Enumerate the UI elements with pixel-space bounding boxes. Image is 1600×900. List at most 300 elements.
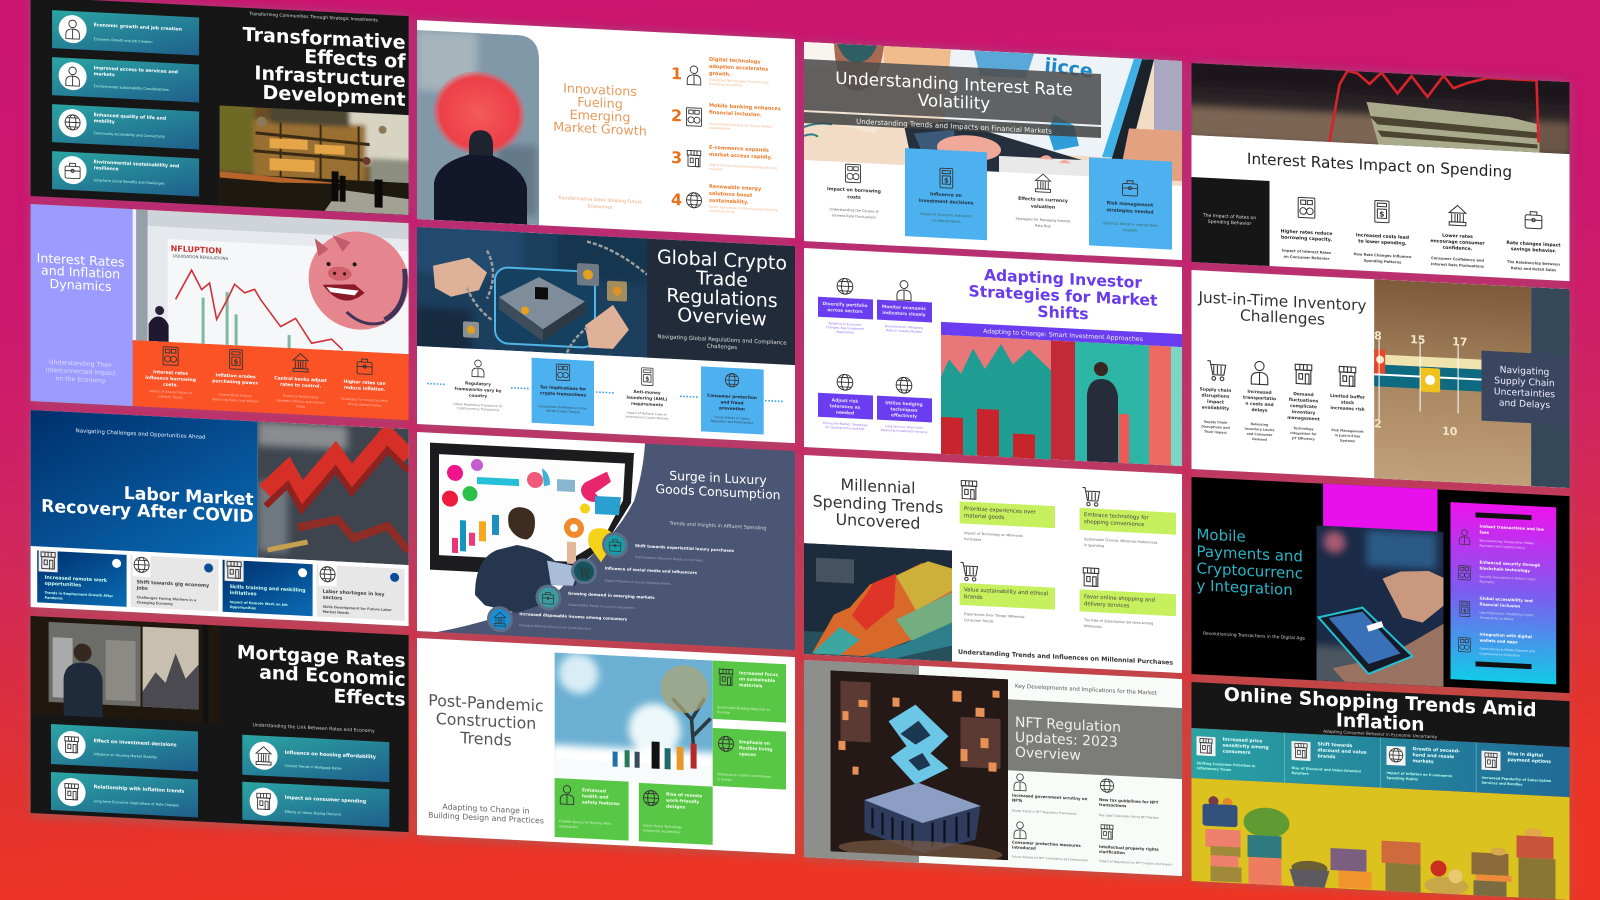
card 4: Favor online shopping and (1084, 594, 1155, 604)
item 3 (626, 367, 669, 421)
item 4 (671, 182, 778, 216)
item 2 (1292, 740, 1367, 779)
item 2: Retailers (1292, 771, 1309, 776)
subtitle: Revolutionizing Transactions in the Digital Age (1203, 631, 1305, 642)
item 1: costs (847, 194, 861, 201)
point 4 (487, 606, 628, 639)
photo: inflation chart and pig (132, 209, 409, 354)
item 3: Technology (1293, 426, 1315, 431)
card: adjust risk: needed (836, 410, 854, 417)
item 1: Increased price (1222, 737, 1262, 745)
strip dividers (1284, 733, 1476, 792)
card: diversify: Approaches (836, 330, 854, 335)
card 1: Pandemic (45, 596, 63, 601)
card 2: shopping convenience (1084, 519, 1145, 528)
item 2: financial inclusion. (709, 110, 762, 118)
item 3: Impact of Rational Laws on (627, 411, 667, 417)
item 4: Limited buffer (1330, 393, 1366, 401)
card 4: Millennials (1084, 624, 1102, 629)
title: Dynamics (50, 276, 112, 294)
gradient panel (1450, 502, 1556, 684)
item 3: inventory (1292, 409, 1315, 416)
item 4: Consumer protection (707, 393, 757, 400)
slide: Mobile Payments and Cryptocurrency Integration (1192, 477, 1570, 698)
item 1: Disruptions and (1201, 424, 1230, 430)
photo: desk and laptop (804, 42, 1182, 186)
item 3: complicate (1290, 403, 1317, 410)
green card 2: Emphasis on (739, 739, 770, 747)
item 2 (919, 167, 974, 225)
item 4: Intellectual property rights (1099, 844, 1159, 852)
subtitle: Trends and Insights in Affluent Spending (669, 521, 766, 532)
item 1: borrowing capacity. (1281, 235, 1332, 243)
item 1 (1196, 735, 1269, 774)
photo: man with red sphere (417, 30, 539, 225)
card 3: Experiences Over Things: Millennial (964, 612, 1025, 619)
green card 1: the Rise (717, 710, 730, 715)
item 1: Impact of Interest Rates on (149, 389, 192, 395)
slide: Millennial Spending Trends Uncovered (804, 455, 1182, 673)
slide: Post-Pandemic Construction Trends (417, 638, 795, 854)
item 4: reduce inflation. (344, 385, 386, 393)
item 2: transportatio (1243, 395, 1276, 402)
green card 2: spaces (739, 752, 756, 758)
green card 3: Flexible Spaces for Remote Work (559, 819, 612, 826)
item 4: Historical Trends in Interest Rate (1102, 221, 1158, 228)
item 2: Increased costs lead (1356, 232, 1409, 241)
card: diversify: Changes: Key Investment (826, 325, 865, 331)
item 1 (145, 346, 196, 400)
item 4: Services and Bundles (1482, 781, 1522, 787)
title: Strategies for Market (969, 282, 1158, 310)
title: Interest Rates (37, 250, 125, 270)
item 3: Global accessibility and (1480, 596, 1533, 603)
card: access: markets (94, 71, 115, 78)
item 4 (707, 372, 757, 425)
item 2: Compliance Challenges in Cross- (538, 404, 588, 411)
photo: building (220, 106, 409, 216)
item 4: Higher rates can (344, 379, 386, 387)
card 1: opportunities (45, 581, 81, 589)
card 2: Challenges Facing Workers in a (137, 595, 197, 602)
item 4: 4 (671, 190, 682, 209)
card 2: in Spending (1084, 543, 1104, 548)
dotted arrows (427, 384, 783, 401)
subtitle: Adapting to Change in (442, 802, 530, 816)
card: investment decisions: Influence on Housing Market Stability (94, 752, 157, 759)
item 4 (1102, 179, 1158, 234)
card: adjust risk: for Optimal Entry and Exit (825, 425, 865, 431)
title: and Economic (259, 663, 406, 691)
title: Surge in Luxury (669, 468, 767, 488)
card: housing affordability: Influence on housing affordability (285, 750, 377, 760)
slide: Interest Rates and Inflation Dynamics (31, 204, 409, 420)
photo: crypto locks (417, 227, 647, 358)
item 2 (1243, 361, 1276, 442)
title: Trade (695, 267, 748, 292)
green card 2: Emphasis on Health and Wellness (717, 772, 771, 779)
item 4 (1482, 750, 1552, 788)
item 2: transactions (1099, 802, 1127, 808)
item 4: Risk Management (1331, 428, 1364, 434)
item 1 (453, 359, 503, 412)
card: access: Environmental Sustainability Considerations (94, 84, 169, 92)
photo: winter scene (554, 652, 713, 786)
item 2: n costs and (1245, 401, 1274, 408)
subtitle: Adapting Consumer Behavior in Economic Uncertainty (1323, 729, 1438, 739)
title: Uncovered (836, 510, 920, 533)
title: Fueling (577, 94, 623, 111)
card: quality of life: mobility (94, 118, 115, 125)
card: sustainability: resilience (94, 165, 119, 172)
item 3: Digital Finance Revolutionizing Access and (709, 163, 777, 170)
photo: NFT cube (830, 670, 1008, 860)
title: Effects (334, 686, 406, 711)
item 1 (671, 55, 769, 89)
card text: Supply Chain (1494, 375, 1555, 389)
item 1: Disruptive Technologies Transforming (709, 78, 769, 85)
title: Online Shopping Trends Amid (1224, 685, 1537, 721)
green card 4: designs (666, 804, 685, 811)
item 4 (1099, 825, 1172, 867)
slide: Transformative Effects of Infrastructure Development (31, 0, 415, 215)
item 2: blockchain technology (1480, 566, 1530, 573)
item 1: Supply Chain (1204, 420, 1228, 425)
card 2 (131, 554, 219, 611)
item 3: Rate Risk (1035, 224, 1051, 228)
item 4: Increased Popularity of Subscription (1482, 776, 1552, 783)
item 3: laundering (AML) (627, 395, 668, 402)
item 1: Emerging Economies (709, 82, 743, 87)
card 2: Embrace technology for (1084, 512, 1149, 521)
card 4 (317, 563, 405, 621)
photo: timeline: 17 (1452, 335, 1467, 349)
subtitle: Challenges (707, 344, 737, 351)
item 3 (274, 352, 328, 410)
slide: Labor Market Recovery After COVID (31, 410, 409, 626)
item 4: Systems (1340, 438, 1355, 443)
item 4: Volatility (1123, 228, 1137, 233)
item 3: Future Outlook for NFT Compliance and Enforcement (1012, 855, 1089, 862)
kicker: Key Developments and Implications for the Market (1015, 684, 1158, 697)
item 3: hand and resale (1412, 752, 1454, 760)
item 4: prevention (719, 405, 745, 412)
title: Mortgage Rates (237, 642, 406, 672)
item 4: Regulation and Enforcement (711, 419, 754, 425)
item 1: costs. (163, 382, 178, 388)
item 2 (671, 101, 781, 133)
card: economic growth: Economic growth and job creation (94, 22, 182, 33)
card: monitor: Monitor economic (882, 304, 927, 312)
item 2: Rise of Discount and Value-Oriented (1292, 766, 1361, 774)
card: housing affordability: Current Trends in Mortgage Rates (285, 764, 342, 771)
item 1: Global Regulatory Framework for (453, 402, 503, 408)
card: monitor (877, 279, 932, 334)
card 4: sectors (323, 595, 342, 602)
card: inflation trends (51, 772, 198, 817)
item 3: management (1287, 415, 1320, 422)
card: adjust risk: Adjust risk (832, 397, 858, 405)
green card 4: work-friendly (666, 798, 699, 805)
item 3 (1016, 173, 1071, 229)
point 1: Post-Pandemic Recovery Boosts Luxury Sales (635, 555, 703, 562)
man at screen (475, 505, 581, 616)
card 1: Increased remote work (45, 575, 108, 584)
card: access: Improved access to services and (94, 65, 178, 75)
subtitle: Navigating Challenges and Opportunities Ahead (76, 428, 206, 441)
card: monitor: Diversification: Mitigating (885, 324, 923, 330)
card: quality of life: Enhanced quality of life and (94, 112, 166, 122)
item 2 (1354, 199, 1412, 265)
monitor with charts (430, 443, 634, 580)
card 4 (1089, 157, 1172, 250)
magenta block (1323, 484, 1438, 539)
card 4: Skills Development for Future Labor (323, 605, 392, 612)
card: consumer spending: Impact on consumer spending (285, 795, 367, 805)
navigating card (1482, 351, 1570, 425)
item 1: Supply chain (1200, 386, 1231, 394)
item 1: consumers (1222, 749, 1251, 756)
item 2: Impact of Economic Indicators (920, 212, 972, 218)
card 3 (960, 562, 1055, 627)
subtitle: Interconnected Impact (46, 367, 116, 377)
item 1: Their Impact (1204, 430, 1227, 435)
item 1: on Consumer Behavior (1284, 255, 1330, 261)
item 4: Cryptocurrency Integration (1480, 652, 1520, 658)
subtitle band (804, 112, 1101, 138)
point 4: Increased disposable income among consumers (519, 611, 628, 622)
item 2: Development (709, 126, 731, 131)
point 2: Digital Influence on Luxury Shopping Habits (605, 578, 671, 586)
item 1: availability (1202, 405, 1229, 412)
item 4: Impact of Regulations on NFT Creators and Buyers (1099, 859, 1172, 867)
item 4: Strategies for Investing Amid (341, 397, 388, 403)
title: Just-in-Time Inventory (1197, 288, 1367, 315)
green card 3: health and (582, 793, 609, 801)
blue title panel (31, 410, 258, 557)
item 2: Border Crypto Trading (547, 409, 580, 414)
item 3 (1386, 745, 1460, 784)
card: sustainability: Long-term Social Benefits and Challenges (94, 178, 165, 186)
title: y Integration (1196, 576, 1293, 599)
green card 4 (639, 783, 713, 845)
title: Challenges (1240, 306, 1325, 329)
photo: phone in hand (1316, 526, 1444, 687)
item 4 (1459, 630, 1535, 658)
item 4: solutions boost (709, 191, 753, 199)
item 3: Historical Relationship (283, 394, 318, 400)
title: Regulations (666, 285, 778, 312)
item 2: New tax guidelines for NFT (1099, 797, 1159, 805)
item 1: Interest rates (153, 369, 188, 377)
item 3: Rates (296, 404, 305, 409)
item 2: on Interest Rates (932, 218, 961, 224)
item 4: Integration with digital (1480, 632, 1533, 639)
green card 3: safety features (582, 799, 620, 807)
item 1 (1459, 523, 1544, 551)
item 4: payment options (1508, 757, 1551, 765)
blue card 2 (701, 366, 764, 435)
title: Post-Pandemic (428, 691, 544, 715)
item 1: Regulatory (465, 380, 491, 387)
card: economic growth: Economic Growth and Job Creation (94, 37, 153, 44)
item 2: discount and value (1318, 747, 1367, 756)
item 1: NFTs (1012, 798, 1023, 803)
card text: Navigating (1500, 365, 1549, 378)
item 1 (1200, 360, 1231, 435)
photo: inflation chart and pig: NFLUPTION (171, 244, 222, 256)
title panel (1008, 699, 1182, 779)
item 3 (1012, 822, 1089, 862)
black box (1192, 177, 1270, 266)
title: Global Crypto (657, 246, 787, 275)
title: Effects of (304, 45, 406, 73)
card 3: initiatives (230, 590, 257, 597)
item 1: Interest Rate Fluctuations (832, 213, 876, 220)
item 4: stock (1341, 400, 1354, 406)
item 2: Inventory Levels (1245, 427, 1275, 432)
slide: Surge in Luxury Goods Consumption (417, 432, 795, 650)
item 3: Demand (1293, 391, 1314, 398)
card 1: material goods (964, 513, 1005, 521)
item 4: Risk management (1107, 200, 1154, 209)
slide: Global Crypto Trade Regulations Overview (412, 222, 795, 443)
item 2: Tax implications for (540, 384, 587, 392)
card 3: Skills training and reskilling (230, 584, 306, 594)
card 1: Impact of Technology on Millennial (964, 531, 1023, 538)
item 3: User Experience: Simplifying Crypto (1480, 611, 1534, 617)
title band (804, 59, 1101, 125)
box text: Spending Behavior (1208, 219, 1251, 227)
green card 1: materials (739, 682, 763, 689)
card: diversify: Diversify portfolio (823, 301, 867, 309)
teal strip (1192, 728, 1570, 797)
slide: Adapting Investor Strategies for Market Shifts (804, 248, 1182, 466)
item 2: investment decisions (919, 198, 974, 207)
item 3: Transactions on Mobile (1479, 615, 1514, 621)
photo: rainbow terrain (804, 543, 952, 662)
point 1 (602, 531, 735, 564)
item 3: Inclusion (709, 167, 723, 171)
photo: cash and red chart (1192, 63, 1570, 154)
card: hedging: effectively (891, 412, 917, 420)
item 1: country (469, 393, 487, 399)
item 1: 1 (671, 64, 682, 83)
item 1: Impact of Interest Rates (1282, 249, 1331, 255)
title: Inflation (1336, 710, 1425, 736)
item 4: Rising Interest Rates (348, 402, 381, 408)
item 1: influence borrowing (145, 375, 196, 383)
card: quality of life: Community Accessibility and Connectivity (94, 131, 165, 139)
item 2: crypto transactions (540, 390, 587, 398)
item 1: Revolutionizing Transactions: Mobile (1480, 539, 1534, 545)
title: Overview (677, 304, 767, 331)
card: inflation trends: Long-term Economic Implications of Rate Changes (94, 799, 179, 808)
item 3: introduced (1012, 845, 1036, 851)
card 4 (1080, 567, 1176, 633)
card 3: Value sustainability and ethical (964, 587, 1048, 597)
item 2: Demand (1252, 437, 1268, 442)
item 1: adoption accelerates (709, 64, 768, 73)
card 1 (960, 480, 1055, 546)
item 4: Rates and Retail Sales (1511, 266, 1556, 272)
point 4: Emerging Markets Drive Luxury Goods Demand (519, 623, 591, 631)
item 4: strategies needed (1106, 207, 1154, 216)
card: adjust risk (818, 373, 873, 431)
subtitle: Understanding Trends and Impacts on Financial Markets (856, 118, 1052, 136)
green card 2: flexible living (739, 745, 772, 753)
item 4: clarification (1099, 849, 1125, 855)
title: Innovations (563, 80, 637, 99)
photo: timeline (1374, 279, 1570, 488)
card: monitor: indicators closely (882, 310, 926, 318)
title: NFT Regulation (1015, 715, 1121, 736)
item 4: Rate changes impact (1506, 240, 1561, 249)
title: Understanding Interest Rate (835, 68, 1073, 100)
title: Payments and (1197, 542, 1303, 566)
item 4 (1330, 366, 1366, 444)
card 3 (223, 559, 313, 616)
green card 3 (555, 778, 629, 841)
title: Transformative (243, 23, 406, 54)
item 1: Understanding the Causes of (829, 207, 879, 214)
item 3 (1287, 364, 1320, 441)
title: Trends (459, 728, 512, 750)
item 2: brands (1318, 753, 1336, 760)
title: Market Growth (553, 119, 647, 139)
item 3: Central banks adjust (274, 375, 328, 384)
item 4: sustainability. (709, 198, 749, 206)
subtitle: Understanding the Link Between Rates and Economy (252, 722, 375, 734)
item 2: Central Bank Policies: (218, 392, 253, 398)
title: Labor Market (124, 484, 254, 510)
item 3: Growth of second- (1412, 746, 1460, 755)
item 3: Interest Rate Fluctuations (1431, 262, 1484, 269)
item 1: Higher rates reduce (1281, 229, 1332, 237)
title: Volatility (918, 90, 990, 113)
photo: inflation chart and pig: LIQUIDATION REGULATIONS (173, 253, 229, 261)
item 3: requirements (631, 401, 663, 407)
green card 1: Increased focus (739, 670, 778, 678)
item 1: Increased government scrutiny on (1012, 793, 1088, 801)
card 2: jobs (136, 585, 148, 592)
card: access (52, 57, 199, 103)
green card 2 (713, 728, 786, 790)
item 2: to lower spending. (1358, 238, 1407, 247)
green card 1: Sustainable Building Materials on (717, 705, 770, 712)
title: Adapting Investor (984, 266, 1142, 292)
card: hedging: Long-term vs. Short-term (885, 424, 923, 430)
photo: baskets and coins on yellow (1192, 778, 1570, 900)
item 1: impact (1207, 399, 1224, 406)
item 3: Consumer Confidence and (1431, 256, 1484, 263)
card 2: Sustainable Choices: Millennial Preferences (1084, 537, 1158, 545)
item 2: Spending Patterns (1364, 259, 1401, 265)
card 3: Opportunities (230, 605, 256, 610)
item 1: disruptions (1201, 393, 1230, 400)
blue card 1 (532, 358, 594, 426)
item 3: Anti-money (633, 389, 661, 395)
green card 4: Smart Home Technology (643, 823, 682, 829)
card 1: Prioritize experiences over (964, 506, 1037, 516)
white lower area (804, 160, 905, 246)
subtitle: Understanding Their (49, 359, 113, 369)
item 2: Key Legal Challenges Facing NFT Markets (1099, 813, 1159, 820)
title: Development (262, 81, 406, 111)
band text: Adapting to Change: Smart Investment Approaches (983, 328, 1143, 343)
item 1 (1281, 197, 1332, 261)
item 1: Instant transactions and low (1480, 524, 1544, 532)
